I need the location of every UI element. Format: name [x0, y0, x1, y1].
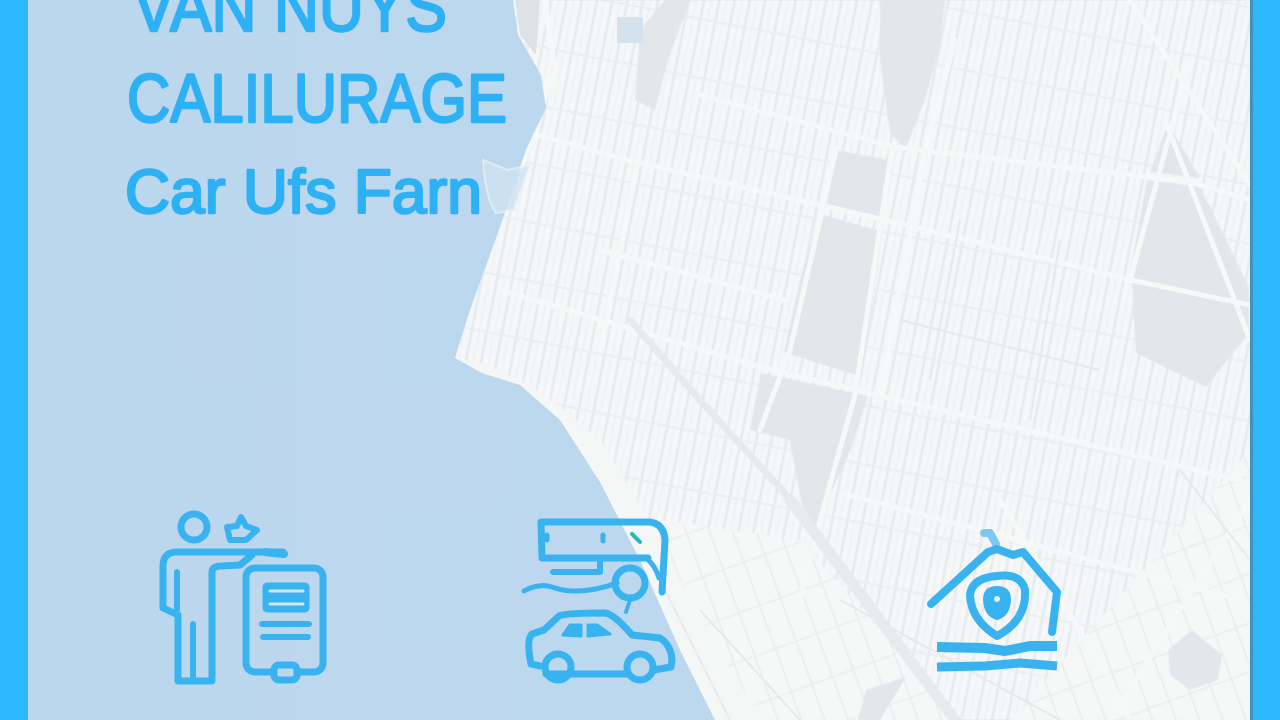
- bus: [541, 522, 665, 592]
- grey thin roads: [650, 220, 1250, 720]
- inland water patch: [617, 17, 643, 43]
- icon: house with location shield: [931, 533, 1057, 667]
- coastal inlet tint: [515, 0, 540, 55]
- icon: bus and car: [524, 522, 672, 680]
- waves: [937, 646, 1057, 651]
- faded letter ghost: [483, 160, 530, 213]
- chimney: [984, 533, 996, 544]
- coastal strip: [455, 358, 762, 720]
- roof: [931, 549, 1057, 632]
- diagonal street districts: [660, 450, 1250, 720]
- main roads: [500, 0, 1250, 720]
- tablet: [246, 568, 323, 672]
- title: [125, 0, 507, 227]
- land base with street grid: [440, 0, 1250, 720]
- street map: [440, 0, 1250, 720]
- left frame: [0, 0, 28, 720]
- car: [529, 613, 672, 674]
- right frame: [1250, 0, 1280, 720]
- freeway: [630, 320, 955, 720]
- grey blocks and parks: [635, 0, 1249, 720]
- title line 2: CALILURAGE: [127, 60, 507, 137]
- title line 3: Car Ufs Farn: [125, 158, 482, 227]
- shield: [970, 576, 1025, 636]
- icon: person with document: [163, 514, 323, 681]
